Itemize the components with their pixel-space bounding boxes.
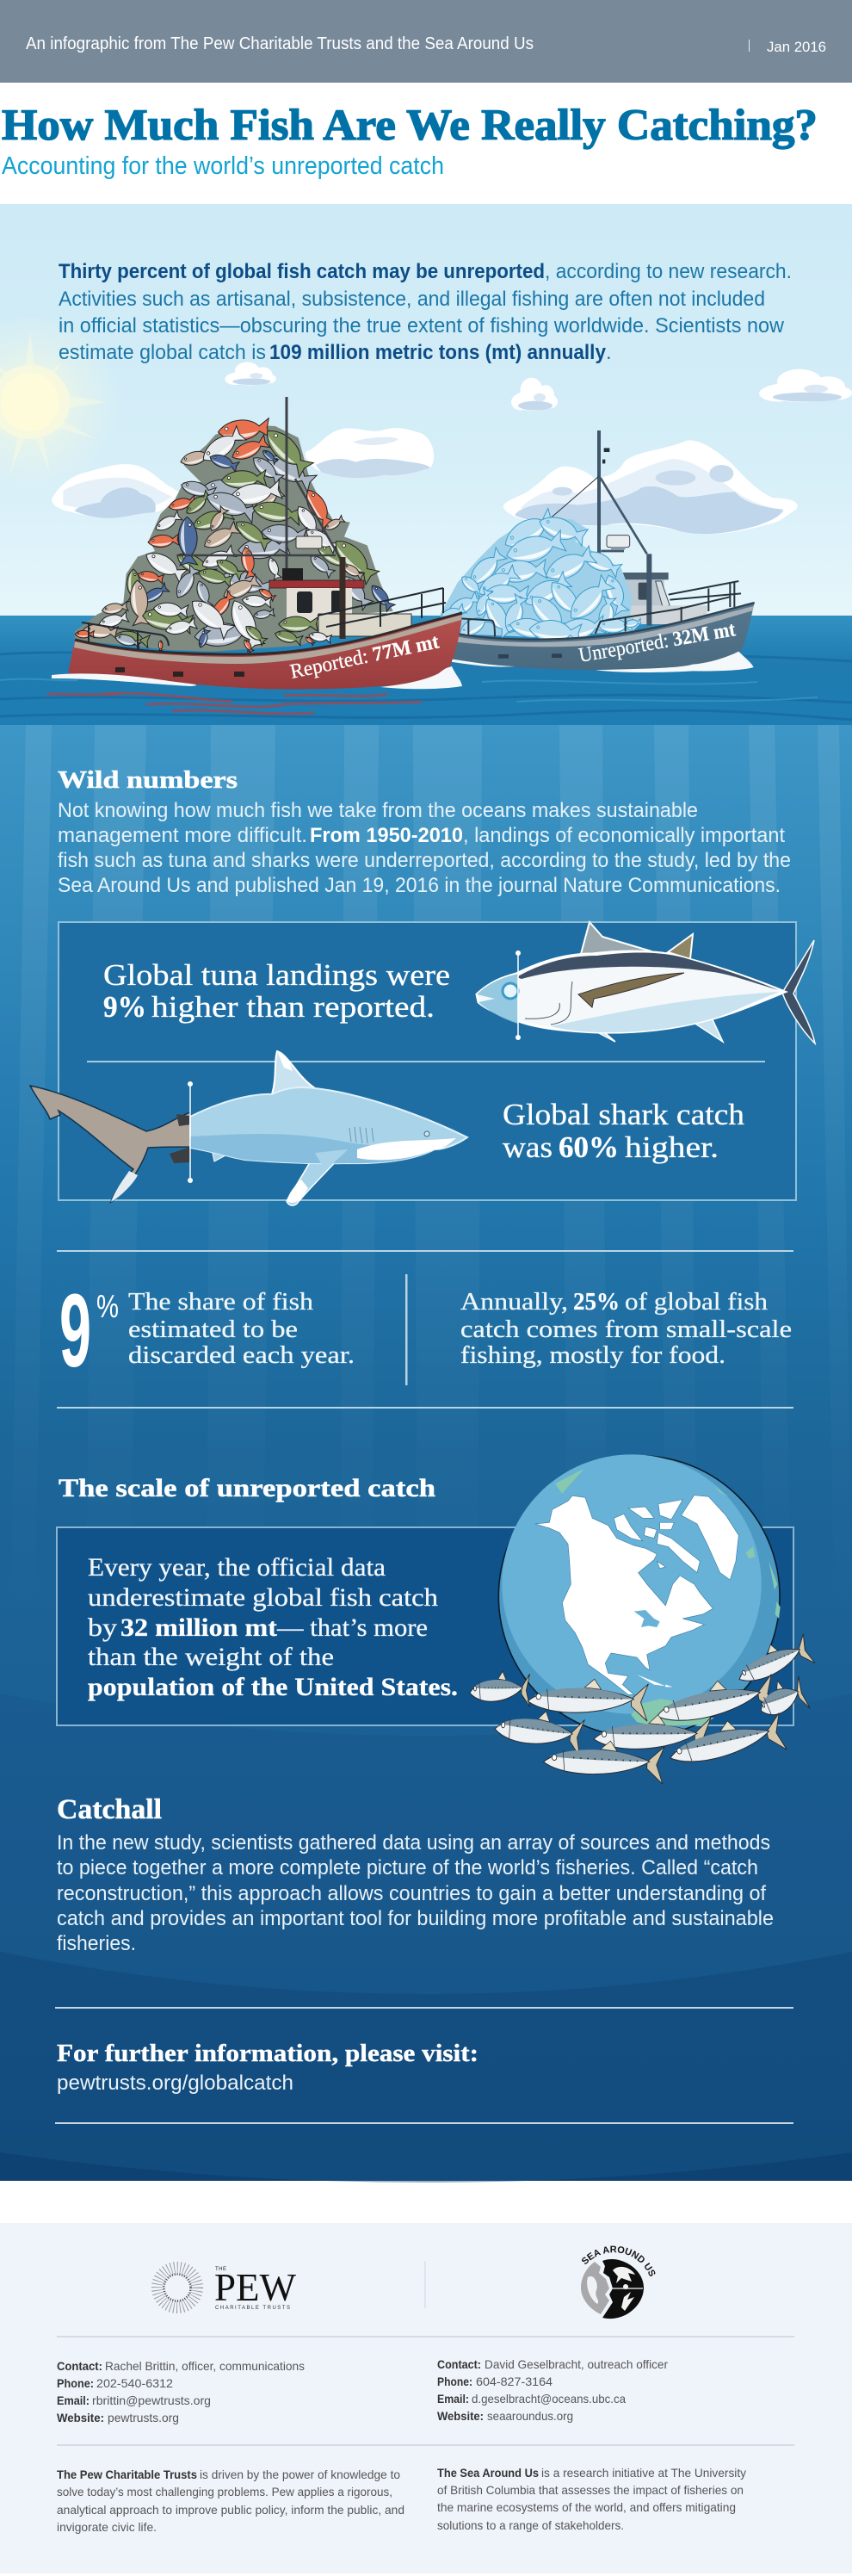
about: Sea Around Us: the marine ecosystems of the world, and offers mitigating [437, 2500, 736, 2514]
body text: catchall: catch and provides an important tool for building more profitable and sustainable [57, 1907, 774, 1930]
body text: catchall: fisheries. [57, 1932, 136, 1955]
panel: scale callout: than the weight of the [88, 1643, 334, 1671]
text: shark [503, 1098, 745, 1164]
illustration: gray boat with unreported catch [437, 430, 755, 672]
intro text: Activities such as artisanal, subsistence, and illegal fishing are often not included [59, 288, 765, 311]
about: Pew: is driven by the power of knowledge to [200, 2468, 400, 2481]
contact: Pew: rbrittin@pewtrusts.org [92, 2393, 211, 2407]
contact: Sea Around Us: d.geselbracht@oceans.ubc.ca [472, 2392, 626, 2406]
about: Pew: solve today’s most challenging problems. Pew applies a rigorous, [57, 2485, 392, 2499]
heading: scale of unreported catch: The scale of unreported catch [59, 1474, 435, 1502]
further information block: For further information, please visit: [57, 2040, 478, 2067]
about: Pew [57, 2468, 404, 2534]
intro text: Thirty percent of global fish catch may be unreported [59, 260, 545, 283]
intro text: 109 million metric tons (mt) annually [269, 341, 607, 364]
panel: statistics row [57, 1250, 793, 1409]
title: How Much Fish Are We Really Catching? [2, 102, 818, 150]
clouds [52, 362, 852, 534]
foam [52, 666, 462, 689]
pile of reported fish [75, 418, 395, 653]
contact: Sea Around Us: David Geselbracht, outreach officer [485, 2357, 668, 2371]
contact: Pew: Rachel Brittin, officer, communications [105, 2359, 305, 2373]
post and railings [460, 554, 741, 636]
text: shark: Global shark catch [503, 1098, 745, 1131]
panel: footer [0, 2223, 852, 2573]
contact: Sea Around Us: Website: [437, 2409, 484, 2423]
about: Pew: The Pew Charitable Trusts [57, 2468, 197, 2481]
logo: Pew [157, 2265, 297, 2311]
body text: wild numbers: , landings of economically important [463, 824, 785, 847]
hull [449, 603, 755, 670]
body text: catchall: In the new study, scientists gathered data using an array of sources and methods [57, 1831, 770, 1855]
text: shark: was [503, 1130, 553, 1164]
about: Pew: analytical approach to improve public policy, inform the public, and [57, 2503, 404, 2517]
panel: underwater background [0, 725, 852, 2183]
contact: Pew: Contact: [57, 2359, 102, 2373]
text: tuna: Global tuna landings were [103, 958, 450, 992]
intro text: , according to new research. [545, 260, 792, 283]
panel: sky [0, 204, 852, 617]
body text: wild numbers [58, 799, 791, 897]
intro text: in official statistics—obscuring the true extent of fishing worldwide. Scientists now [59, 314, 785, 337]
big number: 9 percent: % [96, 1289, 119, 1324]
icon: sun [0, 312, 120, 492]
radar [296, 536, 322, 548]
panel: scale callout: Every year, the official data [88, 1553, 386, 1582]
text: tuna: higher than reported. [151, 990, 435, 1024]
logo: Sea Around Us [581, 2245, 656, 2319]
text: small-scale share [460, 1288, 792, 1369]
panel: scale callout: — that’s more [276, 1613, 428, 1642]
pile of unreported fish [437, 507, 642, 644]
about: Sea Around Us: solutions to a range of stakeholders. [437, 2518, 624, 2532]
section: catchall [57, 1794, 774, 1955]
catch in front of cabin [274, 616, 331, 646]
body text: catchall: to piece together a more complete picture of the world’s fisheries. Called “catch [57, 1856, 758, 1879]
contact: Pew: pewtrusts.org [108, 2411, 179, 2424]
logo: Pew: THE [215, 2267, 226, 2272]
contact: Sea Around Us: Contact: [437, 2357, 481, 2371]
text: discarded share: estimated to be [128, 1316, 298, 1343]
body text: wild numbers: management more difficult. [58, 824, 307, 847]
header bar [0, 0, 852, 83]
further information block: pewtrusts.org/globalcatch [57, 2071, 293, 2095]
about: Sea Around Us: The Sea Around Us [437, 2466, 539, 2480]
illustration: globe with fish school [470, 1454, 815, 1784]
intro text [59, 260, 792, 364]
contact: Sea Around Us: Email: [437, 2392, 469, 2406]
logo: Pew: CHARITABLE TRUSTS [215, 2306, 290, 2311]
panel: scale callout: 32 million mt [120, 1613, 277, 1642]
intro text: . [606, 341, 612, 364]
header bar: Jan 2016 [767, 39, 826, 55]
text: discarded share [128, 1288, 355, 1369]
body text: catchall [57, 1831, 774, 1955]
panel: scale callout: by [88, 1613, 117, 1642]
text: small-scale share: Annually, [460, 1288, 568, 1316]
heading: catchall: Catchall [57, 1794, 162, 1825]
contact: Sea Around Us [437, 2357, 668, 2423]
about: Sea Around Us: of British Columbia that assesses the impact of fisheries on [437, 2483, 744, 2497]
globe [470, 1454, 815, 1784]
contact: Sea Around Us: 604-827-3164 [476, 2375, 553, 2388]
heading: wild numbers: Wild numbers [58, 766, 238, 794]
contact: Pew: Website: [57, 2411, 104, 2424]
illustration: tuna [477, 922, 815, 1043]
text: discarded share: The share of fish [128, 1288, 314, 1316]
continents [535, 1470, 781, 1726]
text: tuna [103, 958, 450, 1024]
foam [449, 652, 754, 672]
cabin [618, 573, 707, 624]
post and railings [82, 557, 446, 650]
text: small-scale share: fishing, mostly for food. [460, 1341, 725, 1369]
text: tuna: 9% [103, 990, 146, 1024]
body text: wild numbers: fish such as tuna and sharks were underreported, according to the study, led by the [58, 849, 791, 872]
logo: Pew: PEW [214, 2265, 297, 2309]
text: small-scale share: 25% [573, 1288, 620, 1316]
about: Pew: invigorate civic life. [57, 2520, 157, 2534]
text: shark: higher. [625, 1130, 719, 1164]
panel: sea surface [0, 616, 852, 726]
logo: Sea Around Us: SEA AROUND US [582, 2245, 656, 2276]
body text: wild numbers: Not knowing how much fish we take from the oceans makes sustainable [58, 799, 698, 822]
further information block [55, 2007, 793, 2124]
big number: 9 percent: 9 [59, 1272, 91, 1389]
body text: catchall: reconstruction,” this approach allows countries to gain a better understanding of [57, 1882, 766, 1905]
hull label: reported: Reported: 77M mt [288, 630, 441, 684]
panel: scale callout: population of the United States. [88, 1673, 458, 1701]
panel: tuna and shark comparison [30, 922, 815, 1205]
text: small-scale share: catch comes from small-scale [460, 1316, 792, 1343]
about: Sea Around Us [437, 2466, 746, 2532]
mast and rigging [551, 430, 647, 557]
intro text: estimate global catch is [59, 341, 266, 364]
subtitle: Accounting for the world’s unreported catch [2, 152, 444, 180]
panel: scale callout [57, 1527, 793, 1725]
header bar: An infographic from The Pew Charitable Trusts and the Sea Around Us [26, 34, 534, 53]
cabin [269, 568, 411, 636]
fish school [470, 1632, 815, 1784]
illustration: shark [30, 1051, 467, 1205]
contact: Pew [57, 2359, 305, 2424]
radar [607, 536, 630, 549]
contact: Sea Around Us: seaaroundus.org [487, 2409, 573, 2423]
contact: Pew: Email: [57, 2393, 90, 2407]
panel: scale callout: underestimate global fish catch [88, 1583, 438, 1612]
text: discarded share: discarded each year. [128, 1341, 355, 1369]
body text: wild numbers: Sea Around Us and published Jan 19, 2016 in the journal Nature Communications. [58, 874, 781, 897]
contact: Pew: 202-540-6312 [96, 2376, 173, 2390]
mast and boom [178, 397, 341, 568]
hull [68, 613, 462, 690]
body text: wild numbers: From 1950-2010 [310, 824, 463, 847]
text: small-scale share: of global fish [625, 1288, 769, 1316]
illustration: red boat with reported catch [52, 397, 462, 690]
contact: Pew: Phone: [57, 2376, 94, 2390]
about: Sea Around Us: is a research initiative at The University [541, 2466, 746, 2480]
section: wild numbers [58, 766, 791, 897]
hull label: unreported: Unreported: 32M mt [577, 618, 737, 667]
text: shark: 60% [559, 1130, 619, 1164]
reflection: red boat [47, 693, 422, 714]
contact: Sea Around Us: Phone: [437, 2375, 472, 2388]
